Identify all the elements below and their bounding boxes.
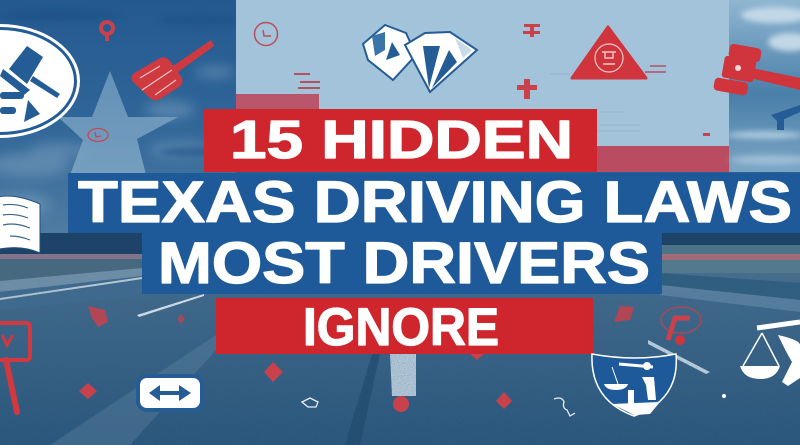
icon: plus mark — [517, 79, 537, 99]
icon: red spatula — [132, 40, 214, 100]
panel: highway road scene — [0, 233, 800, 445]
icon: justice shield — [592, 354, 676, 416]
icon: white scales — [740, 322, 800, 386]
blue banner: Texas driving laws: TEXAS DRIVING LAWS — [78, 170, 792, 235]
icon: red marks on road — [79, 306, 512, 412]
red banner: ignore: IGNORE — [303, 298, 499, 357]
icon: red gavel — [713, 43, 800, 96]
icon: small red key mark — [101, 22, 113, 41]
icon: red chevron below banner — [470, 354, 484, 360]
tree line — [0, 233, 145, 255]
icon: Texas star — [58, 71, 178, 175]
icon: red minus — [703, 133, 710, 136]
road markings — [0, 277, 142, 300]
panel: middle light blue — [236, 0, 729, 172]
icon: red document mark — [614, 306, 634, 322]
icon: open book — [0, 196, 40, 253]
icon: red road sign — [0, 323, 30, 412]
icon: clock on star — [88, 128, 108, 142]
red banner: ignore — [216, 298, 593, 357]
icon: diamonds — [363, 25, 477, 92]
icon: red music note in ring — [661, 307, 701, 345]
icon: small blue truck mark — [771, 105, 800, 130]
icon: clock on light panel — [254, 22, 278, 46]
title block — [68, 109, 800, 357]
icon: red dashes — [294, 74, 320, 88]
panel: right sky — [727, 0, 800, 172]
icon: double arrow sign — [138, 376, 202, 410]
icon: small white outline marks — [302, 398, 575, 416]
guardrail — [0, 254, 145, 259]
red banner: 15 hidden — [204, 109, 597, 172]
panel: left sky with Texas star — [0, 0, 240, 235]
blue banner: most drivers: MOST DRIVERS — [158, 231, 650, 296]
red banner: 15 hidden: 15 HIDDEN — [230, 110, 573, 170]
road grain — [0, 290, 800, 445]
icon: red warning triangle — [572, 27, 666, 78]
icon: gavel badge — [0, 24, 80, 138]
icon: cross mark — [523, 24, 540, 37]
